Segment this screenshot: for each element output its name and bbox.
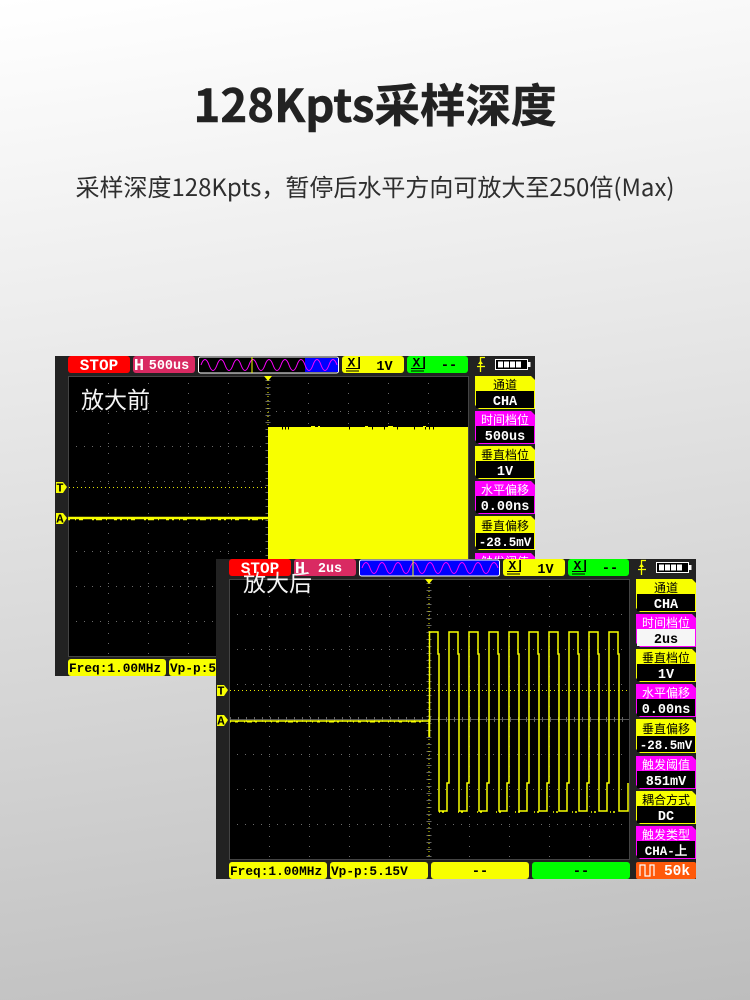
icon: battery — [496, 360, 530, 370]
icon: trigger edge — [638, 560, 646, 575]
menu: trigger threshold: 触发阈值 — [481, 553, 529, 570]
menu: timebase — [475, 411, 535, 445]
menu: vertical scale — [636, 649, 696, 683]
menu: timebase: 时间档位 — [481, 411, 529, 428]
plot area — [230, 579, 630, 860]
menu: trigger type — [636, 826, 696, 859]
side menu — [636, 579, 696, 859]
marker: T: T — [56, 482, 64, 496]
screen: after zoom — [216, 558, 696, 880]
menu: vertical offset — [475, 516, 535, 550]
menu: channel: 通道 — [654, 579, 678, 596]
channel A badge: 1V — [376, 360, 393, 375]
marker: T — [217, 684, 228, 698]
timebase badge — [294, 559, 356, 579]
menu: channel — [636, 579, 696, 613]
channel A badge: X| — [348, 356, 363, 370]
icon: battery — [656, 562, 692, 572]
timebase badge: 2us — [318, 562, 342, 577]
channel B badge: X| — [412, 356, 428, 370]
menu: trigger threshold: 851mV — [646, 775, 687, 790]
menu: vertical offset: 垂直偏移 — [481, 517, 529, 534]
menu: timebase (selected): 时间档位 — [642, 614, 690, 631]
channel A badge: 1V — [537, 563, 554, 578]
subtitle: 采样深度128Kpts，暂停后水平方向可放大至250倍(Max) — [75, 168, 675, 203]
menu: horizontal offset: 水平偏移 — [642, 684, 690, 701]
menu: vertical scale: 垂直档位 — [481, 446, 529, 463]
waveform: signal — [68, 426, 468, 667]
menu: vertical scale — [475, 446, 535, 480]
menu: horizontal offset: 水平偏移 — [481, 481, 529, 498]
menu: horizontal offset: 0.00ns — [642, 703, 690, 718]
label: after zoom: 放大后 — [243, 564, 312, 598]
readout: peak to peak: Vp-p:5.15V — [331, 864, 408, 879]
title: 128Kpts采样深度 — [194, 70, 556, 136]
waveform overview — [198, 357, 338, 373]
plot area — [68, 376, 468, 656]
icon: trigger edge — [477, 358, 485, 372]
menu: timebase (selected) — [636, 614, 696, 648]
stop badge — [68, 356, 130, 375]
channel B badge — [568, 558, 629, 577]
readout: sample rate: 50k — [664, 864, 690, 880]
waveform: square pulses — [230, 632, 628, 812]
menu: trigger threshold: 触发阈值 — [642, 756, 690, 773]
channel A badge — [342, 356, 404, 375]
readout: empty yellow: -- — [472, 865, 488, 880]
marker: T: T — [217, 684, 225, 698]
readout: frequency: Freq:1.00MHz — [69, 661, 161, 676]
channel B badge: -- — [602, 562, 618, 577]
marker: A — [56, 512, 67, 526]
readout: peak to peak: Vp-p:5.15V — [170, 661, 247, 676]
menu: channel — [475, 376, 535, 410]
menu: horizontal offset: 0.00ns — [481, 500, 529, 515]
menu: timebase: 500us — [485, 430, 525, 445]
menu: vertical offset: 垂直偏移 — [642, 720, 690, 737]
channel B badge — [407, 356, 468, 374]
timebase badge: H — [295, 560, 305, 579]
menu: trigger threshold — [475, 553, 535, 586]
readout: empty yellow — [431, 862, 529, 880]
bottom bar — [229, 862, 696, 880]
menu: trigger threshold — [636, 756, 696, 790]
marker: A: A — [56, 512, 64, 526]
menu: vertical scale: 1V — [658, 668, 675, 683]
channel A badge: X| — [508, 558, 524, 574]
readout: empty green — [532, 862, 630, 880]
readout: peak to peak — [169, 659, 267, 676]
stop badge: STOP — [241, 560, 279, 578]
menu: coupling — [636, 791, 696, 825]
label: before zoom: 放大前 — [81, 381, 150, 415]
menu: vertical scale: 垂直档位 — [642, 649, 690, 666]
menu: horizontal offset — [475, 481, 535, 515]
menu: vertical offset — [636, 719, 696, 753]
top bar — [68, 356, 530, 376]
top bar — [229, 558, 692, 579]
readout: frequency: Freq:1.00MHz — [230, 864, 322, 879]
readout: peak to peak — [330, 862, 428, 879]
marker: T — [56, 482, 67, 496]
screen: before zoom — [55, 356, 535, 676]
menu: channel: CHA — [654, 598, 679, 613]
channel B badge: -- — [441, 359, 457, 374]
menu: vertical scale: 1V — [497, 465, 514, 480]
menu: timebase (selected): 2us — [654, 633, 678, 648]
marker: A: A — [217, 714, 225, 728]
waveform overview — [360, 560, 500, 576]
timebase badge — [133, 356, 195, 376]
stop badge: STOP — [80, 357, 118, 375]
bottom bar — [68, 659, 267, 676]
side menu — [475, 376, 535, 586]
menu: coupling: 耦合方式 — [642, 791, 690, 808]
menu: coupling: DC — [658, 810, 674, 825]
marker: A — [217, 714, 228, 728]
readout: empty green: -- — [573, 865, 589, 880]
channel A badge — [503, 558, 565, 578]
timebase badge: H — [134, 357, 144, 376]
timebase badge: 500us — [149, 359, 189, 374]
menu: vertical offset: -28.5mV — [640, 739, 693, 753]
menu: trigger type: 触发类型 — [642, 826, 690, 843]
menu: channel: 通道 — [493, 376, 517, 393]
readout: sample rate — [636, 862, 696, 880]
menu: horizontal offset — [636, 684, 696, 718]
menu: trigger type: CHA-上 — [645, 843, 688, 859]
stop badge — [229, 559, 291, 578]
menu: channel: CHA — [493, 395, 518, 410]
channel B badge: X| — [574, 558, 589, 574]
menu: vertical offset: -28.5mV — [479, 536, 532, 550]
